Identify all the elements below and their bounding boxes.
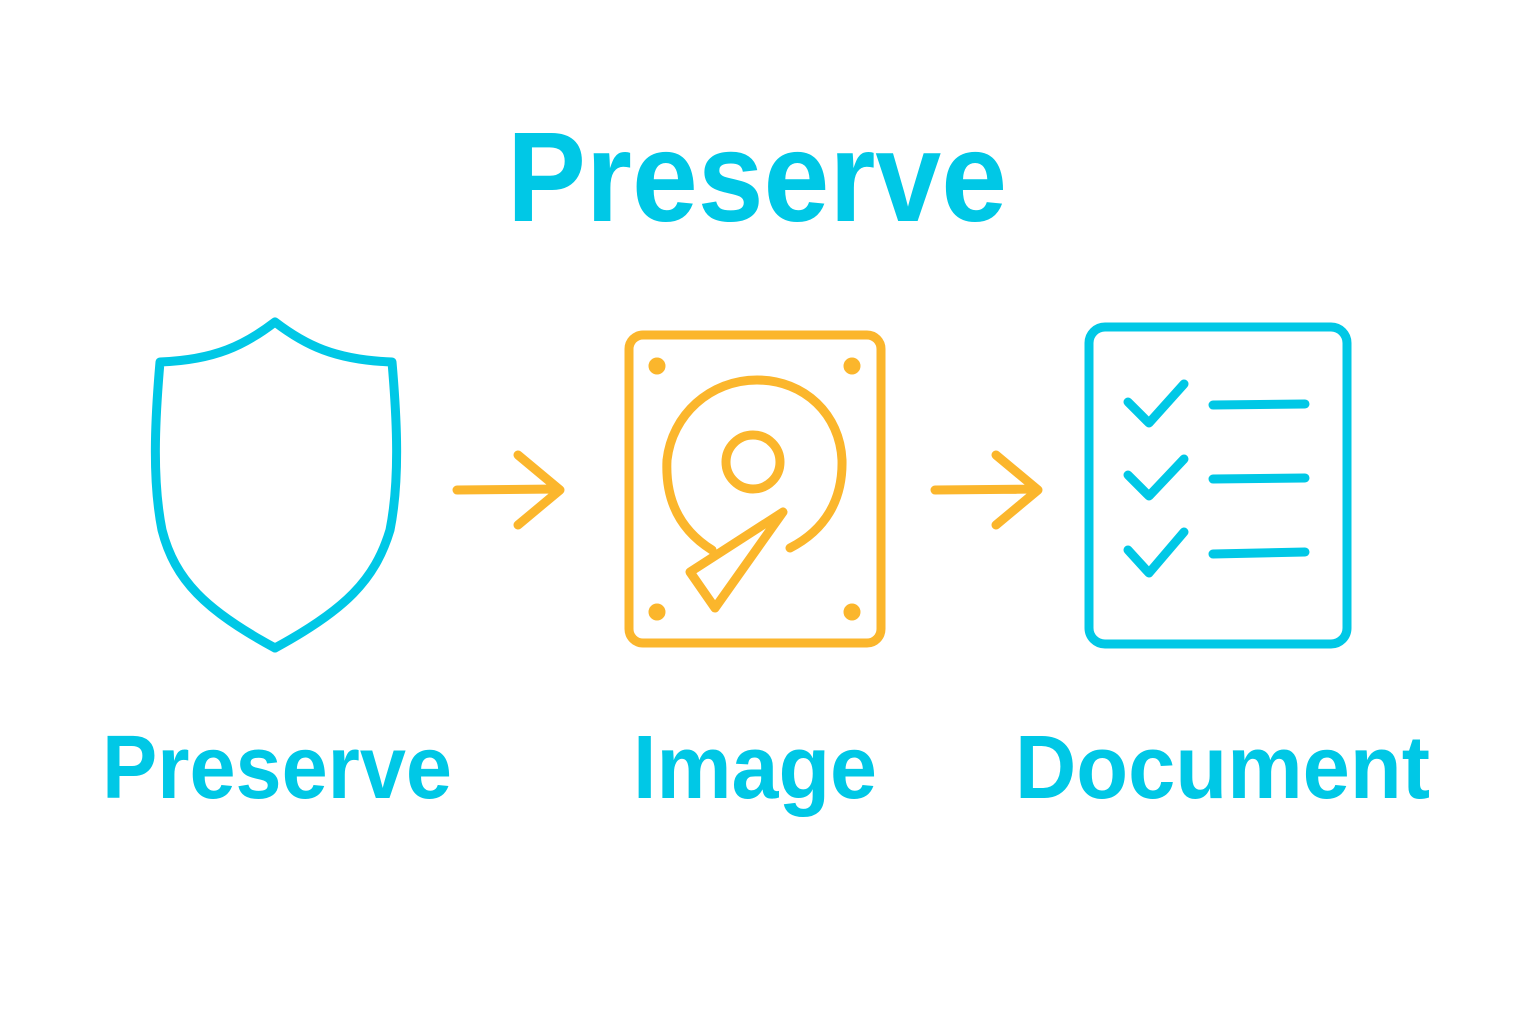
- label: Image: Image: [633, 718, 877, 818]
- icon: checklist document: [1089, 327, 1347, 644]
- label: Document: Document: [1015, 718, 1430, 818]
- arrow 2: [935, 455, 1038, 525]
- label: Preserve: Preserve: [102, 718, 452, 818]
- icon: hard drive: [629, 335, 881, 643]
- title: Preserve: [507, 106, 1007, 249]
- arrow 1: [457, 455, 560, 525]
- icon: shield: [155, 322, 397, 648]
